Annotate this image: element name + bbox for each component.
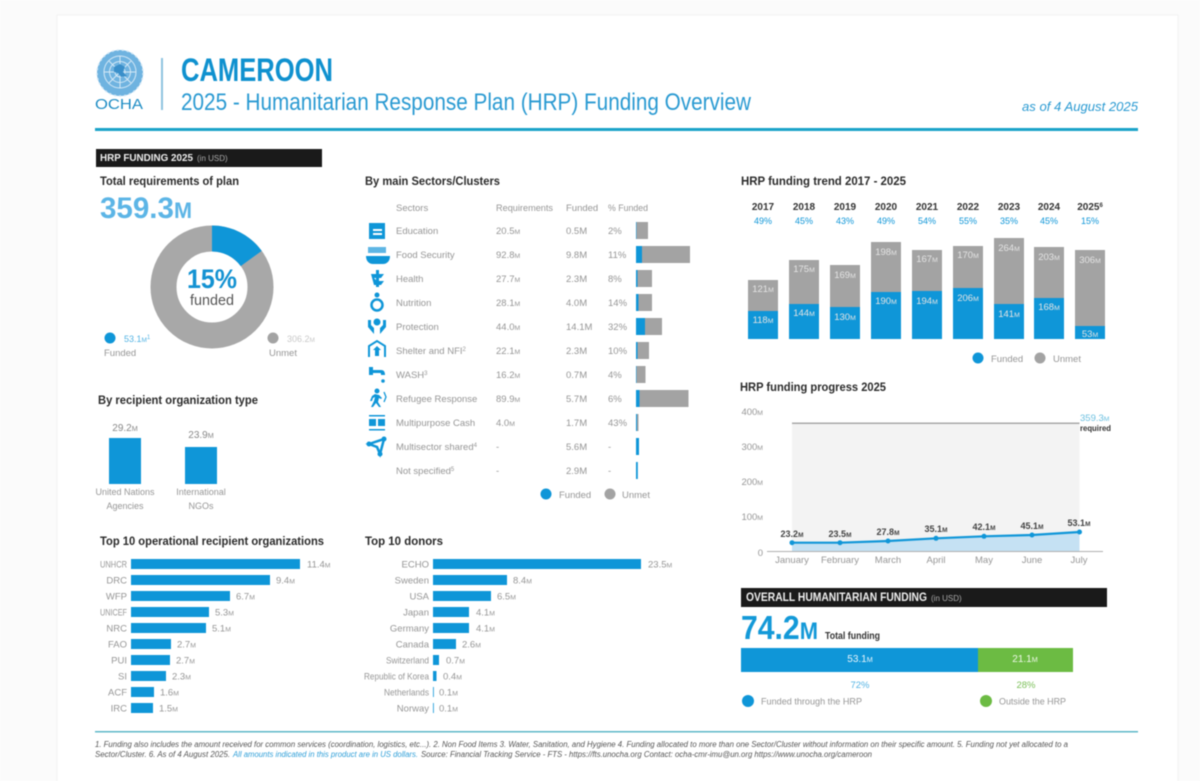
table rows: 22.1M xyxy=(496,346,520,357)
year and percent labels xyxy=(752,202,1103,226)
table rows: 0.7M xyxy=(566,370,587,381)
year and percent labels: 45% xyxy=(1040,216,1058,226)
year and percent labels: 2019 xyxy=(834,202,857,213)
area and line chart: 300M xyxy=(741,442,763,453)
year and percent labels: 2020 xyxy=(875,202,898,213)
area and line chart: 27.8M xyxy=(877,527,899,537)
panel: funding trend xyxy=(741,174,1105,365)
horizontal bar chart xyxy=(100,559,331,714)
horizontal bar chart: 5.3M xyxy=(215,608,234,618)
table rows: Multisector shared xyxy=(396,442,474,453)
heading: Total requirements of plan xyxy=(100,174,239,188)
table rows: 5 xyxy=(451,467,455,473)
panel: sectors table xyxy=(365,174,690,501)
legend: sectors: Unmet xyxy=(622,490,650,501)
bar: international NGOs: International xyxy=(176,487,226,497)
table rows: Shelter and NFI xyxy=(396,346,463,357)
year and percent labels: 2017 xyxy=(752,202,775,213)
horizontal bar chart: Japan xyxy=(403,608,429,618)
area and line chart: 45.1M xyxy=(1021,521,1043,531)
table header: Funded xyxy=(566,203,598,214)
table header: % Funded xyxy=(608,203,648,214)
area and line chart: July xyxy=(1071,555,1088,566)
stacked bar chart: 121M xyxy=(752,284,774,295)
section banner: HRP funding xyxy=(96,149,322,167)
table rows: - xyxy=(496,466,499,477)
section banner: overall humanitarian funding: OVERALL HUMANITARIAN FUNDING xyxy=(746,592,927,604)
horizontal bar chart: 9.4M xyxy=(276,576,295,586)
horizontal bar chart: 0.1M xyxy=(439,688,458,698)
caption: Total funding xyxy=(825,631,880,642)
callout: required amount: required xyxy=(1080,423,1111,433)
table rows: Nutrition xyxy=(396,298,431,309)
table rows: Protection xyxy=(396,322,439,333)
table rows: WASH xyxy=(396,370,424,381)
table rows: - xyxy=(608,466,611,477)
stacked bar chart: 190M xyxy=(875,296,897,307)
stacked bar chart: 198M xyxy=(875,247,897,258)
section banner: overall humanitarian funding: (in USD) xyxy=(931,594,962,603)
horizontal bar chart: 6.5M xyxy=(497,592,516,602)
year and percent labels: 6 xyxy=(1099,203,1103,209)
footnotes: Sector/Cluster. 6. As of 4 August 2025. xyxy=(95,750,230,759)
sector stacked bars xyxy=(636,222,690,479)
legend: unmet xyxy=(268,332,315,359)
horizontal bar chart: 0.7M xyxy=(446,656,465,666)
horizontal bar chart: ECHO xyxy=(402,560,429,570)
table rows: Food Security xyxy=(396,250,455,261)
panel: funding progress xyxy=(740,380,1111,566)
horizontal bar chart: Sweden xyxy=(395,576,429,586)
legend: trend: Unmet xyxy=(1053,354,1081,365)
section banner: overall humanitarian funding xyxy=(741,588,1107,607)
year and percent labels: 45% xyxy=(795,216,813,226)
legend: funded: 53.1M xyxy=(124,334,147,344)
legend: overall xyxy=(742,695,1066,708)
horizontal bar chart: Netherlands xyxy=(384,688,429,698)
table rows: 16.2M xyxy=(496,370,520,381)
stacked bar chart: 141M xyxy=(998,309,1020,320)
bar: international NGOs xyxy=(176,430,226,511)
stacked funding bar: 21.1M xyxy=(1012,654,1038,665)
table rows: 44.0M xyxy=(496,322,520,333)
stacked bar chart: 144M xyxy=(793,308,815,319)
area and line chart: January xyxy=(775,555,809,566)
table rows: 4% xyxy=(608,370,622,381)
table rows: 2.9M xyxy=(566,466,587,477)
area and line chart: June xyxy=(1022,555,1042,566)
horizontal bar chart: 11.4M xyxy=(307,560,331,570)
stacked bar chart: 264M xyxy=(998,243,1020,254)
horizontal bar chart: USA xyxy=(409,592,430,602)
horizontal bar chart: 0.4M xyxy=(443,672,462,682)
OCHA wordmark: OCHA xyxy=(95,96,143,113)
icon: shelter xyxy=(369,341,385,357)
donut chart: 15% xyxy=(187,264,237,294)
stacked bar chart: 206M xyxy=(957,293,979,304)
icon: multisector xyxy=(366,436,386,456)
subtitle: 2025 - Humanitarian Response Plan (HRP) Funding Overview xyxy=(181,89,752,116)
legend: sectors xyxy=(540,488,650,501)
panel: recipient organization type xyxy=(95,393,258,511)
stacked bar chart: 130M xyxy=(834,312,856,323)
area and line chart: April xyxy=(926,555,946,566)
horizontal bar chart: UNHCR xyxy=(100,560,127,570)
legend: funded xyxy=(104,332,151,359)
icon: WASH xyxy=(369,367,385,383)
icon: refugee response xyxy=(370,388,386,407)
year and percent labels: 15% xyxy=(1081,216,1099,226)
table rows: 20.5M xyxy=(496,226,520,237)
year and percent labels: 2018 xyxy=(793,202,816,213)
table rows xyxy=(396,226,628,477)
donut chart: funded xyxy=(190,292,234,309)
horizontal bar chart: Norway xyxy=(397,704,429,714)
panel: top 10 donors xyxy=(364,534,672,714)
table rows: 28.1M xyxy=(496,298,520,309)
horizontal bar chart: 2.7M xyxy=(176,656,195,666)
table rows: 27.7M xyxy=(496,274,520,285)
year and percent labels: 2021 xyxy=(916,202,939,213)
callout: required amount xyxy=(1080,413,1111,433)
table rows: 0.5M xyxy=(566,226,587,237)
horizontal bar chart: PUI xyxy=(111,656,127,666)
icon: multipurpose cash xyxy=(369,415,385,430)
panel: total requirements xyxy=(100,174,315,359)
horizontal bar chart: 4.1M xyxy=(476,608,495,618)
table rows: 4.0M xyxy=(566,298,587,309)
stacked bar chart: 203M xyxy=(1038,252,1060,263)
footnotes xyxy=(95,740,1069,759)
year and percent labels: 2023 xyxy=(998,202,1021,213)
horizontal bar chart: Republic of Korea xyxy=(364,672,430,682)
table rows: Education xyxy=(396,226,438,237)
callout: required amount: 359.3M xyxy=(1080,413,1110,424)
table rows: 11% xyxy=(608,250,627,261)
table header: Requirements xyxy=(496,203,553,214)
percent labels: 28% xyxy=(1016,680,1036,691)
stacked bar chart: 170M xyxy=(957,250,979,261)
footnotes: Source: Financial Tracking Service - FTS - https://fts.unocha.org Contact: ocha-cmr-imu@un.org https://www.unocha.org/cameroon xyxy=(421,750,873,759)
bar: UN agencies: Agencies xyxy=(106,501,144,511)
year and percent labels: 2024 xyxy=(1038,202,1061,213)
percent labels xyxy=(850,680,1036,691)
table rows: 89.9M xyxy=(496,394,520,405)
year and percent labels: 43% xyxy=(836,216,854,226)
section banner: HRP funding: (in USD) xyxy=(197,154,228,163)
heading: By main Sectors/Clusters xyxy=(365,174,500,188)
area and line chart: 100M xyxy=(741,512,763,523)
sector icons xyxy=(366,223,390,456)
table rows: 3 xyxy=(424,371,428,377)
table rows: 6% xyxy=(608,394,622,405)
horizontal bar chart: FAO xyxy=(108,640,127,650)
area and line chart: 200M xyxy=(741,477,763,488)
area and line chart: 23.2M xyxy=(781,529,803,539)
bar: international NGOs: NGOs xyxy=(188,501,214,511)
horizontal bar chart: SI xyxy=(118,672,127,682)
heading: By recipient organization type xyxy=(98,393,258,407)
table header xyxy=(396,203,648,214)
horizontal bar chart: 2.3M xyxy=(172,672,191,682)
table rows: 2% xyxy=(608,226,622,237)
date: as of 4 August 2025 xyxy=(1022,99,1139,114)
stacked bar chart: 168M xyxy=(1038,302,1060,313)
title: CAMEROON xyxy=(181,52,333,88)
bar: UN agencies: United Nations xyxy=(95,487,155,497)
legend: unmet: 306.2M xyxy=(287,334,315,344)
table rows: - xyxy=(608,442,611,453)
stacked funding bar xyxy=(741,648,1073,672)
table rows: 4.0M xyxy=(496,418,515,429)
area and line chart: February xyxy=(821,555,859,566)
table rows: 92.8M xyxy=(496,250,520,261)
icon: protection xyxy=(368,318,386,334)
stacked bar chart: 53M xyxy=(1082,329,1098,340)
stacked bar chart: 167M xyxy=(916,254,938,265)
legend: funded: 1 xyxy=(147,335,151,341)
table rows: 5.7M xyxy=(566,394,587,405)
table rows: Health xyxy=(396,274,423,285)
table header: Sectors xyxy=(396,203,428,214)
table rows: 2 xyxy=(463,347,467,353)
table rows: 14% xyxy=(608,298,628,309)
horizontal bar chart: ACF xyxy=(108,688,127,698)
icon: nutrition xyxy=(372,292,382,310)
stacked bar chart: 118M xyxy=(753,315,774,326)
horizontal bar chart: NRC xyxy=(106,624,127,634)
icon: OCHA UN emblem xyxy=(97,50,143,96)
bar: UN agencies: 29.2M xyxy=(112,423,138,434)
year and percent labels: 2025 xyxy=(1077,202,1099,213)
icon: education xyxy=(369,223,385,239)
legend: trend xyxy=(972,352,1081,365)
year and percent labels: 49% xyxy=(754,216,772,226)
horizontal bar chart: 5.1M xyxy=(212,624,231,634)
legend: trend: Funded xyxy=(991,354,1023,365)
heading: Top 10 operational recipient organizations xyxy=(100,534,324,548)
donut chart xyxy=(164,238,260,336)
legend: overall: Funded through the HRP xyxy=(761,696,862,708)
table rows: - xyxy=(496,442,499,453)
horizontal bar chart: 2.7M xyxy=(177,640,196,650)
table rows: 2.3M xyxy=(566,274,587,285)
area and line chart: 42.1M xyxy=(973,522,995,532)
big number: 359.3M xyxy=(100,192,192,225)
bar: UN agencies xyxy=(95,423,155,511)
stacked bar chart xyxy=(748,238,1105,340)
area and line chart: March xyxy=(875,555,901,566)
horizontal bar chart: 0.1M xyxy=(439,704,458,714)
panel: top 10 recipient organizations xyxy=(100,534,331,714)
heading: Top 10 donors xyxy=(365,534,443,548)
year and percent labels: 49% xyxy=(877,216,895,226)
footnotes: All amounts indicated in this product are in US dollars. xyxy=(232,750,418,759)
horizontal bar chart: 6.7M xyxy=(236,592,255,602)
table rows: 10% xyxy=(608,346,628,357)
big number: 74.2M xyxy=(741,609,818,646)
heading: HRP funding trend 2017 - 2025 xyxy=(741,174,906,188)
table rows: 1.7M xyxy=(566,418,587,429)
footnotes: 1. Funding also includes the amount received for common services (coordination, logistics, etc...). 2. Non Food Items 3. Water, Sanitation, and Hygiene 4. Funding allocated to more than one Sector/Cluster without information on their specific amount. 5. Funding not yet allocated to a xyxy=(95,740,1069,749)
area and line chart: 35.1M xyxy=(925,524,947,534)
horizontal bar chart xyxy=(364,559,672,714)
table rows: Refugee Response xyxy=(396,394,477,405)
legend: unmet: Unmet xyxy=(269,348,297,359)
header xyxy=(95,50,1139,116)
horizontal bar chart: IRC xyxy=(111,704,127,714)
area and line chart: 23.5M xyxy=(829,529,851,539)
table rows: 14.1M xyxy=(566,322,592,333)
table rows: Multipurpose Cash xyxy=(396,418,475,429)
horizontal bar chart: WFP xyxy=(106,592,127,602)
section banner: HRP funding: HRP FUNDING 2025 xyxy=(100,153,193,164)
year and percent labels: 55% xyxy=(959,216,977,226)
horizontal bar chart: 1.5M xyxy=(159,704,178,714)
panel: overall funding xyxy=(741,609,1073,708)
percent labels: 72% xyxy=(850,680,870,691)
horizontal bar chart: Canada xyxy=(396,640,430,650)
stacked bar chart: 169M xyxy=(834,270,856,281)
area and line chart: 400M xyxy=(741,407,763,418)
horizontal bar chart: 2.6M xyxy=(462,640,481,650)
horizontal bar chart: 8.4M xyxy=(513,576,532,586)
year and percent labels: 2022 xyxy=(957,202,980,213)
icon: health xyxy=(371,270,384,287)
stacked bar chart: 175M xyxy=(793,264,815,275)
table rows: 5.6M xyxy=(566,442,587,453)
table rows: Not specified xyxy=(396,466,451,477)
area and line chart: 53.1M xyxy=(1068,518,1090,528)
table rows: 9.8M xyxy=(566,250,587,261)
legend: funded: Funded xyxy=(104,348,136,359)
stacked funding bar: 53.1M xyxy=(847,654,873,665)
area and line chart: May xyxy=(975,555,993,566)
icon: food security xyxy=(366,247,390,264)
horizontal bar chart: 1.6M xyxy=(160,688,179,698)
year and percent labels: 35% xyxy=(1000,216,1018,226)
bar: international NGOs: 23.9M xyxy=(188,430,214,441)
horizontal bar chart: Germany xyxy=(390,624,429,634)
heading: HRP funding progress 2025 xyxy=(740,380,886,394)
table rows: 4 xyxy=(474,443,478,449)
area and line chart xyxy=(741,407,1103,566)
table rows: 32% xyxy=(608,322,628,333)
table rows: 2.3M xyxy=(566,346,587,357)
legend: sectors: Funded xyxy=(559,490,591,501)
horizontal bar chart: Switzerland xyxy=(386,656,429,666)
legend: overall: Outside the HRP xyxy=(999,696,1066,708)
table rows: 8% xyxy=(608,274,622,285)
horizontal bar chart: 23.5M xyxy=(648,560,672,570)
stacked bar chart: 306M xyxy=(1079,255,1101,266)
horizontal bar chart: 4.1M xyxy=(476,624,495,634)
year and percent labels: 54% xyxy=(918,216,936,226)
horizontal bar chart: DRC xyxy=(106,576,127,586)
horizontal bar chart: UNICEF xyxy=(100,608,127,618)
stacked bar chart: 194M xyxy=(916,296,938,307)
table rows: 43% xyxy=(608,418,628,429)
area and line chart: 0 xyxy=(758,548,763,559)
